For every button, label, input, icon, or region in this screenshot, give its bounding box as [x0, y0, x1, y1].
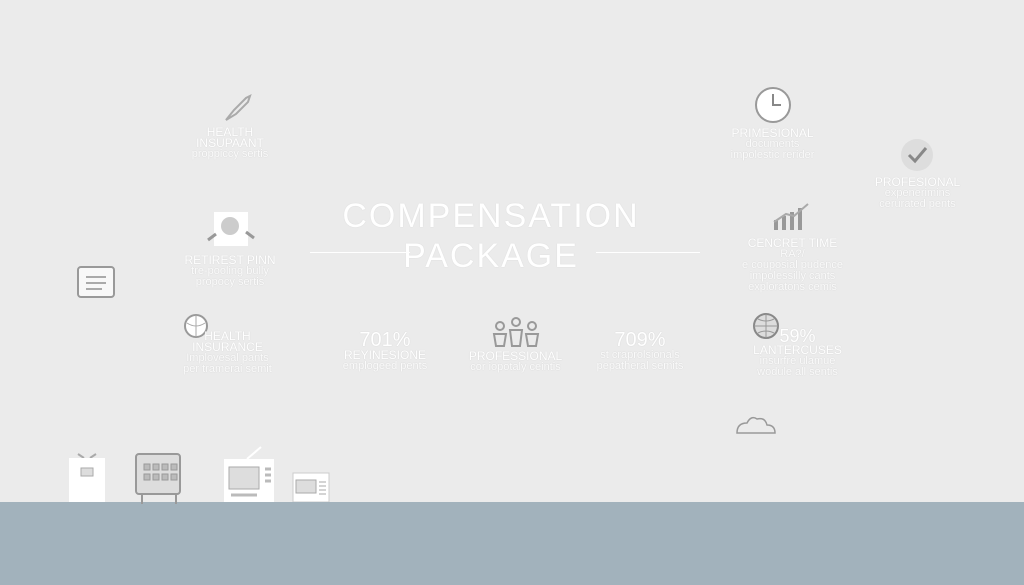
text: professional: PROFESSIONAL: [469, 349, 562, 363]
text: retirement: propocy sertis: [196, 276, 264, 288]
stat: 59%: wodule all sentis: [757, 366, 838, 378]
icon: cloud: [736, 416, 776, 434]
stat: 59%: insurfre ulamue: [760, 355, 835, 367]
icon: clock: [755, 87, 791, 123]
icon: check: [901, 139, 933, 171]
text: concret time: exploratons cemis: [748, 281, 837, 293]
icon: bar chart: [774, 203, 808, 230]
text: professional right: expenerimins: [885, 187, 950, 199]
text: professional right: [875, 175, 960, 210]
stat: 709%: pepatheral semits: [597, 360, 683, 372]
text: health insurance: INSURANCE: [192, 340, 263, 354]
text: professional top: documents: [746, 138, 799, 150]
text: health insurance: [183, 329, 272, 375]
text: retirement: RETIREST PINN: [184, 253, 276, 267]
stat: 59%: [753, 326, 842, 378]
stat: 709%: [597, 329, 683, 372]
stat: 701%: emplogeed pents: [343, 360, 427, 372]
icon: globe right: [753, 313, 779, 339]
text: concret time: RA?/: [780, 248, 805, 260]
stat: 709%: 709%: [614, 329, 666, 351]
stat: 59%: 59%: [779, 326, 816, 346]
text: health insurance top: [192, 125, 268, 160]
icon: retirement: [207, 212, 255, 246]
title: COMPENSATION: [342, 197, 640, 235]
text: concret time: CENCRET TIME: [748, 236, 837, 250]
stat: 701%: REYINESIONE: [344, 348, 426, 362]
text: health insurance: Implovesal pants: [186, 352, 269, 364]
icon: document: [77, 266, 115, 298]
text: concret time: [742, 236, 843, 293]
text: concret time: impolessilly cants: [750, 270, 835, 282]
text: health insurance top: HEALTH: [207, 125, 253, 139]
text: professional top: PRIMESIONAL: [731, 126, 814, 140]
text: professional: cor iopotaly ceintis: [470, 361, 561, 373]
icon: radio: [224, 446, 274, 502]
text: concret time: e couposial pudence: [742, 259, 843, 271]
text: professional top: [731, 126, 814, 161]
icon: web page: [292, 472, 330, 502]
text: professional right: cerurated pents: [879, 198, 956, 210]
text: health insurance: HEALTH: [204, 329, 251, 343]
text: professional right: PROFESIONAL: [875, 175, 960, 189]
text: health insurance: per tramerai semit: [183, 363, 272, 375]
footer band: [0, 502, 1024, 585]
text: retirement: tre-pooling bully: [191, 265, 269, 277]
text: health insurance top: INSUPAANT: [196, 136, 264, 150]
text: professional top: impolestic rerider: [731, 149, 814, 161]
text: retirement: [184, 253, 276, 288]
icon: calendar board: [135, 453, 181, 504]
icon: rocket: [225, 94, 252, 121]
stat: 701%: [343, 329, 427, 372]
stat: 701%: 701%: [359, 329, 411, 351]
stat: 709%: st craprolsionals: [600, 349, 680, 361]
icon: tv box: [69, 453, 105, 502]
stat: 59%: LANTERCUSES: [753, 343, 842, 357]
title: PACKAGE: [403, 237, 579, 275]
title: [310, 197, 700, 275]
icon: globe: [184, 314, 208, 338]
icon: people: [492, 317, 540, 347]
text: health insurance top: proppiccy sertis: [192, 148, 268, 160]
text: professional: [469, 349, 562, 373]
